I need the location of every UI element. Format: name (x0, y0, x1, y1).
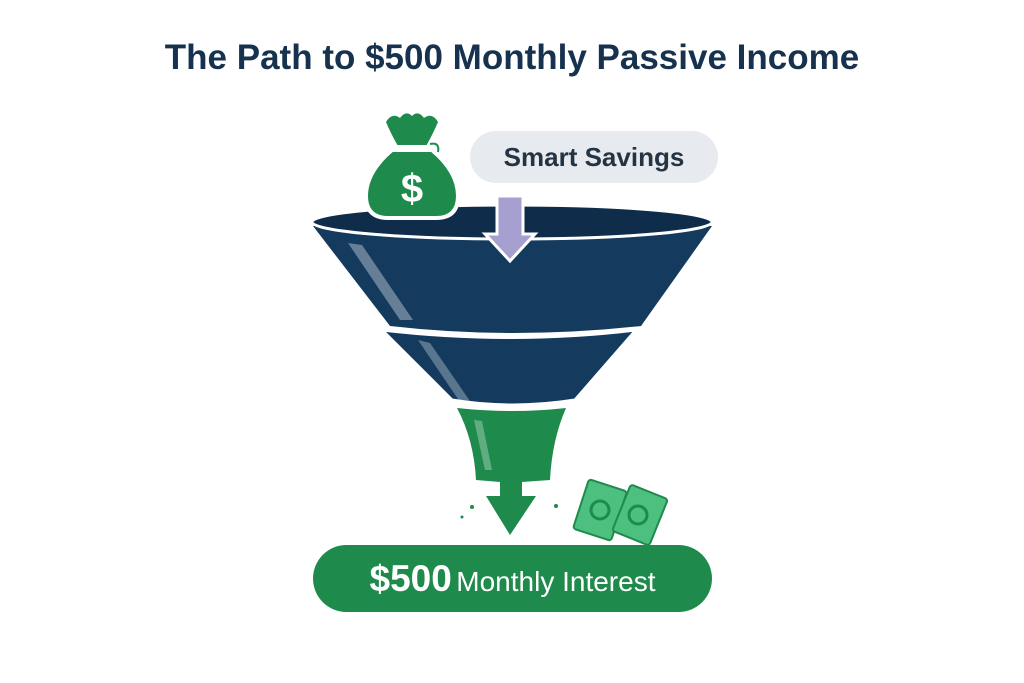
green spout with arrow (457, 408, 566, 535)
funnel upper section (312, 205, 712, 333)
icon: money bag (366, 113, 458, 218)
icon: cash bills (573, 479, 668, 546)
result pill: $500 Monthly Interest (370, 558, 655, 599)
label: Smart Savings (470, 131, 718, 183)
funnel lower section (382, 330, 636, 405)
label: Smart Savings: Smart Savings (504, 142, 684, 172)
title: The Path to $500 Monthly Passive Income (165, 38, 859, 77)
result pill (313, 545, 712, 612)
arrow: lavender down (485, 196, 535, 261)
icon: money bag: $ (401, 167, 423, 211)
